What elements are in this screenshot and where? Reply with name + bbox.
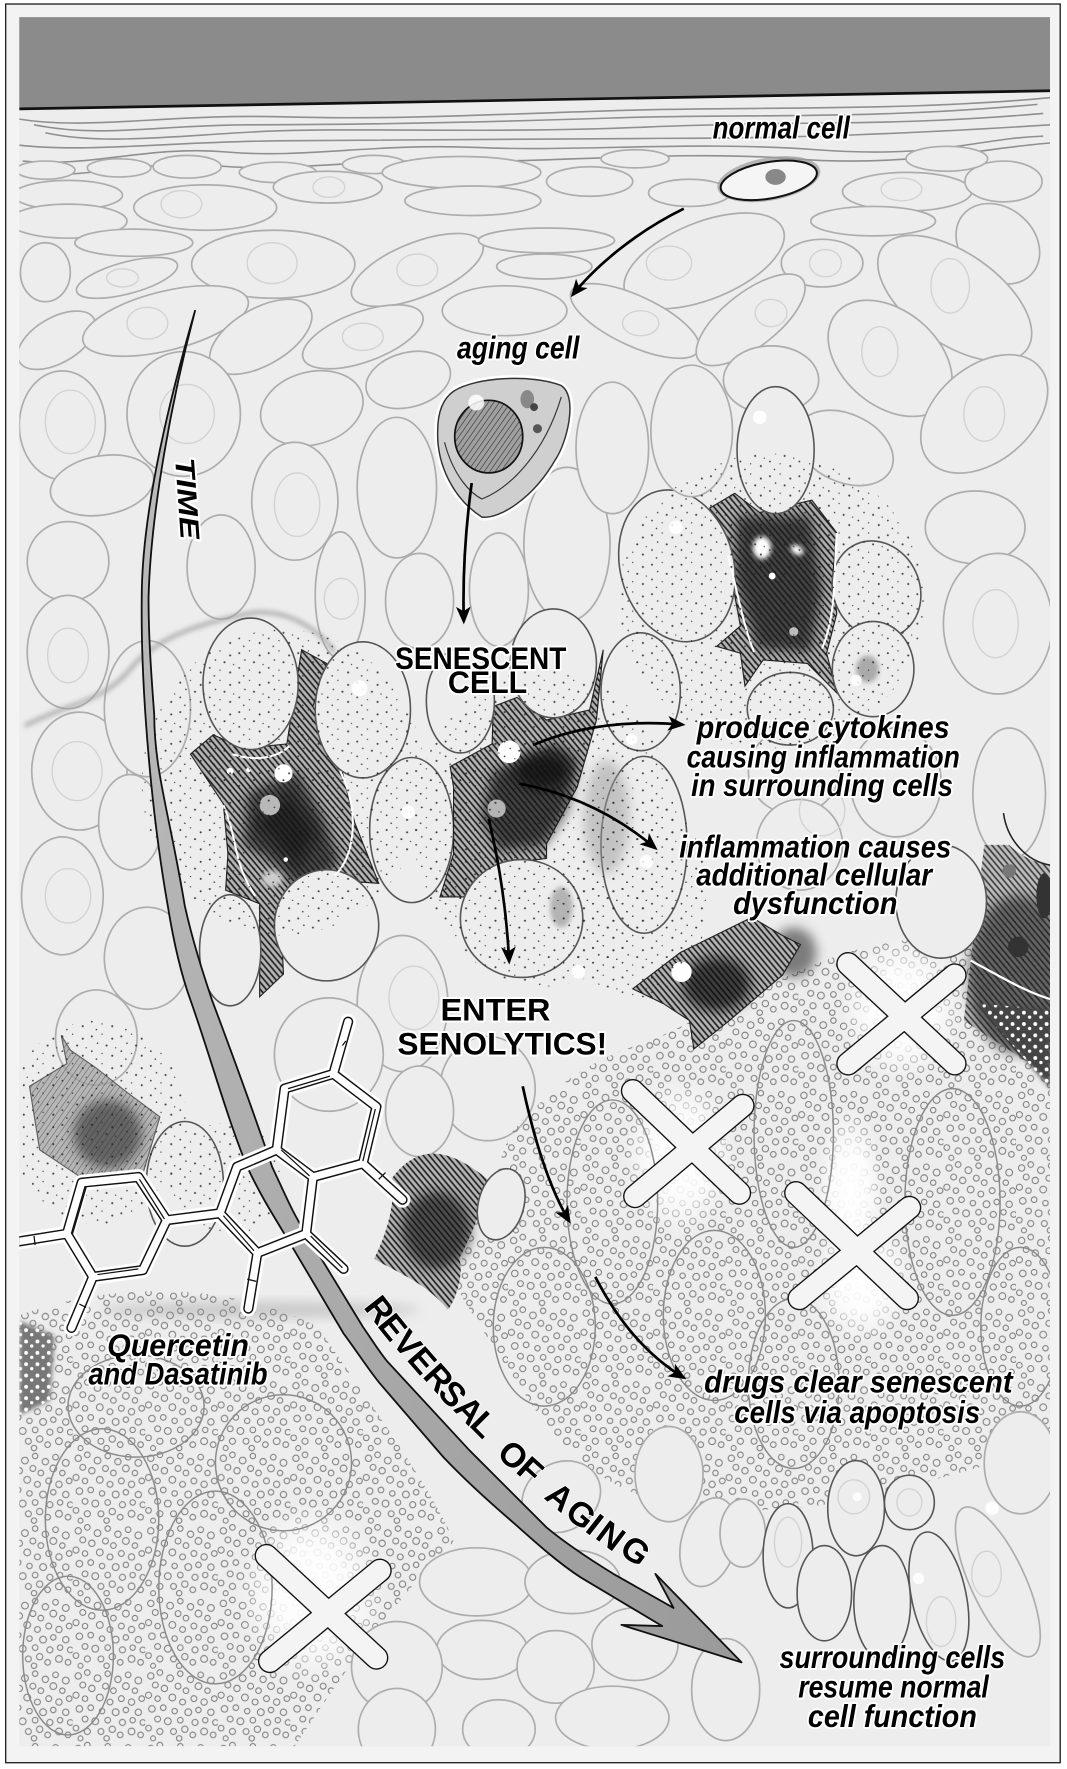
label: enter senolytics: ENTER — [441, 992, 551, 1028]
senescent cell: right edge — [896, 813, 1067, 1089]
label: aging cell: aging cell — [457, 329, 580, 365]
lower right recovering cells — [352, 1412, 1057, 1769]
aging cell — [438, 378, 570, 517]
wavy outer skin layers — [19, 91, 1051, 175]
white X marks over dead cells — [266, 964, 955, 1661]
dissolving cell outlines — [23, 1021, 1060, 1735]
molecule: quercetin and dasatinib — [10, 1022, 403, 1328]
label: inflammation causes: dysfunction — [733, 885, 897, 921]
label: surrounding cells resume: surrounding cells — [780, 1639, 1005, 1675]
label: enter senolytics: SENOLYTICS! — [397, 1026, 607, 1062]
label: surrounding cells resume: resume normal — [798, 1669, 990, 1705]
senescent cell: centre, main — [426, 609, 687, 977]
thick shadowed cell walls at left — [25, 612, 335, 726]
label: produce cytokines: causing inflammation — [687, 739, 960, 775]
label: inflammation causes: additional cellular — [696, 857, 934, 893]
label: surrounding cells resume — [780, 1639, 1005, 1734]
label: surrounding cells resume: cell function — [808, 1698, 977, 1734]
top dark surface band — [19, 17, 1050, 109]
label: produce cytokines — [687, 709, 960, 803]
background cells: middle layers — [19, 331, 1067, 709]
dark bubble corner at left edge — [19, 1321, 54, 1415]
white cleared patches — [238, 936, 964, 1684]
label: quercetin and dasatinib: Quercetin — [107, 1327, 249, 1363]
white highlight spots — [352, 411, 999, 1584]
label: produce cytokines: in surrounding cells — [691, 767, 953, 803]
shadow behind molecule — [102, 1302, 420, 1318]
label: senescent cell — [395, 640, 567, 700]
bubble regions: dissolving apoptotic cells — [19, 907, 1051, 1746]
background cells: lower left — [22, 641, 1045, 1157]
senescent cell: upper right — [602, 365, 937, 745]
senescent cell: below the inflammation label — [633, 917, 816, 1049]
time arrow — [142, 311, 742, 1662]
senescent cell: far left — [29, 1035, 223, 1246]
label: inflammation causes: inflammation causes — [679, 828, 951, 864]
label: senescent cell: CELL — [448, 664, 527, 700]
senescent cell: left — [190, 618, 454, 1006]
label: drugs clear senescent cells: cells via apoptosis — [734, 1394, 980, 1430]
label: inflammation causes — [679, 828, 951, 921]
normal cell — [717, 156, 820, 202]
label: quercetin and dasatinib — [88, 1327, 268, 1392]
label: senescent cell: SENESCENT — [395, 640, 567, 676]
label: produce cytokines: produce cytokines — [696, 709, 950, 745]
stipple around senescent cells — [6, 454, 924, 1236]
label: enter senolytics — [397, 992, 607, 1062]
senescent cell: beside molecule — [374, 1154, 532, 1310]
label: reversal of aging: REVERSAL OF AGING — [357, 1289, 657, 1574]
background cells: upper layers — [8, 146, 1056, 440]
label: quercetin and dasatinib: and Dasatinib — [88, 1356, 268, 1392]
process arrows — [463, 209, 684, 1378]
label: drugs clear senescent cells — [704, 1363, 1014, 1430]
label: time: TIME — [169, 457, 206, 541]
label: normal cell: normal cell — [713, 109, 851, 145]
label: drugs clear senescent cells: drugs clear senescent — [704, 1363, 1014, 1399]
